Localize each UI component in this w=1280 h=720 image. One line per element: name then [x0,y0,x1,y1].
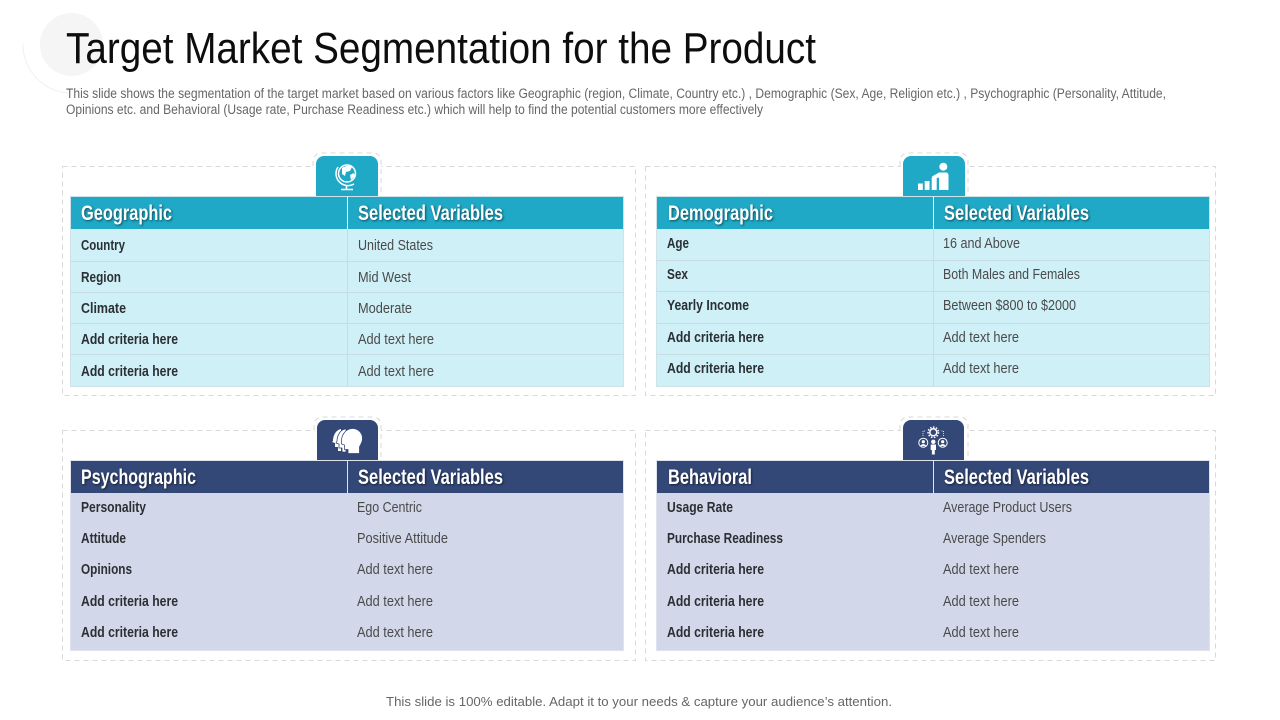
row: Attitude: Positive Attitude [357,531,448,547]
panel: behavioral [646,417,1216,660]
row: criteria 5 [667,361,1019,377]
row: Age: Age [667,236,689,252]
table: psychographic [70,460,624,650]
row: criteria 3: Add criteria here [667,562,764,578]
row: Opinions: Add text here [357,562,433,578]
row: criteria 5 [81,625,433,641]
row: criteria 4 [81,332,434,348]
panel: demographic [646,153,1216,396]
row: Sex: Sex [667,267,688,283]
row: criteria 4: Add criteria here [81,594,178,610]
row: criteria 5: Add criteria here [81,364,178,380]
table: geographic [70,196,624,386]
row: Age: 16 and Above [943,236,1020,252]
table: behavioral [656,460,1210,650]
table: demographic [656,196,1210,386]
row: criteria 5: Add criteria here [667,361,764,377]
row: Region [81,270,411,286]
row: Country: Country [81,238,125,254]
row: Yearly Income [667,298,1076,314]
header: Demographic: Demographic [668,202,773,225]
row: criteria 4 [667,594,1019,610]
row: Country [81,238,433,254]
row: Climate [81,301,412,317]
header: Behavioral: Behavioral [668,466,752,489]
row: criteria 4: Add text here [943,330,1019,346]
row: criteria 5: Add text here [943,625,1019,641]
row: criteria 4: Add criteria here [81,332,178,348]
row: Purchase Readiness [667,531,1046,547]
row: Purchase Readiness: Average Spenders [943,531,1046,547]
icon: person with bar chart [903,156,965,198]
description text: Opinions etc. and Behavioral (Usage rate, Purchase Readiness etc.) which will help to find the potential customers more effectively [66,102,763,117]
row: Usage Rate: Average Product Users [943,500,1072,516]
row: criteria 5: Add criteria here [81,625,178,641]
row: criteria 3: Add text here [943,562,1019,578]
row: criteria 4: Add text here [358,332,434,348]
row: Age [667,236,1020,252]
row: Country: United States [358,238,433,254]
row: Personality: Personality [81,500,146,516]
row: criteria 4 [81,594,433,610]
row: Region: Mid West [358,270,411,286]
row: Attitude [81,531,448,547]
row: Sex: Both Males and Females [943,267,1080,283]
row: criteria 5 [81,364,434,380]
panel: psychographic [62,417,636,660]
description text: This slide shows the segmentation of the target market based on various factors like Geographic (region, Climate, Country etc.) , Demographic (Sex, Age, Religion etc.) , Psychographic (Personality, Attitude, [66,86,1166,101]
row: criteria 5 [667,625,1019,641]
header: Geographic: Geographic [81,202,172,225]
row: Usage Rate: Usage Rate [667,500,733,516]
header: Selected Variables: Selected Variables [358,466,503,489]
row: criteria 4: Add text here [357,594,433,610]
row: Opinions: Opinions [81,562,132,578]
footer note: This slide is 100% editable. Adapt it to your needs & capture your audience’s attention. [386,694,892,709]
description text [66,86,1166,117]
row: criteria 4: Add criteria here [667,594,764,610]
header: Psychographic: Psychographic [81,466,196,489]
row: criteria 5: Add text here [943,361,1019,377]
title: Target Market Segmentation for the Product [66,24,816,73]
row: criteria 5: Add text here [357,625,433,641]
row: Climate: Moderate [358,301,412,317]
row: criteria 4: Add text here [943,594,1019,610]
header: Selected Variables: Selected Variables [358,202,503,225]
row: Purchase Readiness: Purchase Readiness [667,531,783,547]
row: criteria 4 [667,330,1019,346]
header: Selected Variables: Selected Variables [944,466,1089,489]
icon: overlapping heads [317,420,378,462]
row: Climate: Climate [81,301,126,317]
row: Region: Region [81,270,121,286]
row: Yearly Income: Yearly Income [667,298,749,314]
row: Personality: Ego Centric [357,500,422,516]
row: criteria 5: Add text here [358,364,434,380]
row: Sex [667,267,1080,283]
row: criteria 5: Add criteria here [667,625,764,641]
row: Usage Rate [667,500,1072,516]
row: Yearly Income: Between $800 to $2000 [943,298,1076,314]
icon: people around gear [903,420,964,462]
row: Attitude: Attitude [81,531,126,547]
header: Selected Variables: Selected Variables [944,202,1089,225]
row: criteria 4: Add criteria here [667,330,764,346]
row: Opinions [81,562,433,578]
icon: globe on stand [316,156,378,198]
row: criteria 3 [667,562,1019,578]
row: Personality [81,500,422,516]
panel: geographic [62,153,636,396]
